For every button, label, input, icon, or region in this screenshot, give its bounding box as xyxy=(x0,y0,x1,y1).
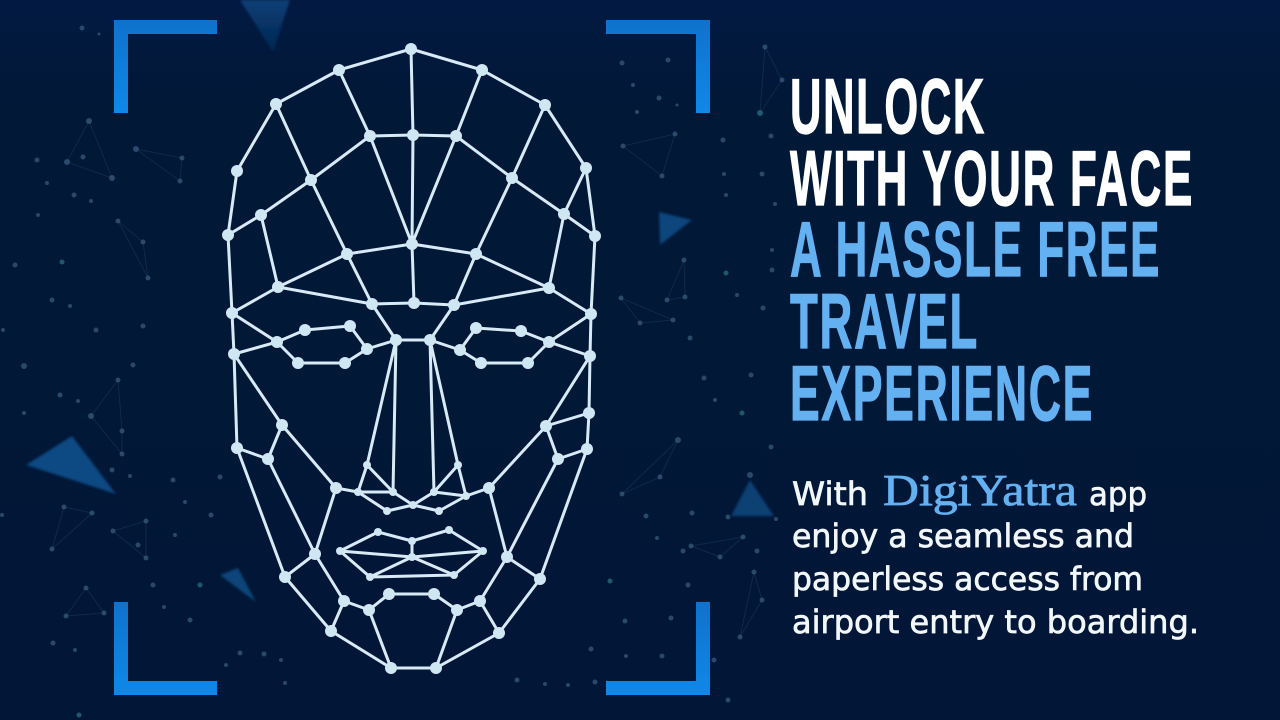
heading xyxy=(790,62,1194,437)
background star dots xyxy=(0,26,784,718)
heading line: travel: TRAVEL xyxy=(790,277,979,365)
icon: facial recognition mesh xyxy=(222,43,601,674)
heading line: unlock: UNLOCK xyxy=(790,62,986,150)
line: enjoy a seamless and: enjoy a seamless and xyxy=(792,517,1134,555)
icon: scan frame corner brackets xyxy=(114,20,710,695)
description text block xyxy=(792,466,1199,641)
mesh lines xyxy=(228,49,595,668)
mesh nodes xyxy=(222,43,601,674)
line: with digiyatra app xyxy=(792,466,1147,515)
decorative triangles xyxy=(26,0,774,602)
top-left bracket xyxy=(114,20,217,113)
line: with digiyatra app: With xyxy=(792,475,868,513)
line: airport entry to boarding: airport entry to boarding. xyxy=(792,603,1199,641)
bottom-left bracket xyxy=(114,602,217,695)
faint constellation lines xyxy=(52,47,782,637)
bottom-right bracket xyxy=(606,602,710,695)
line: with digiyatra app: DigiYatra xyxy=(883,466,1077,515)
line: with digiyatra app: app xyxy=(1089,475,1147,513)
line: paperless access from: paperless access from xyxy=(792,560,1143,598)
top-right bracket xyxy=(606,20,710,113)
